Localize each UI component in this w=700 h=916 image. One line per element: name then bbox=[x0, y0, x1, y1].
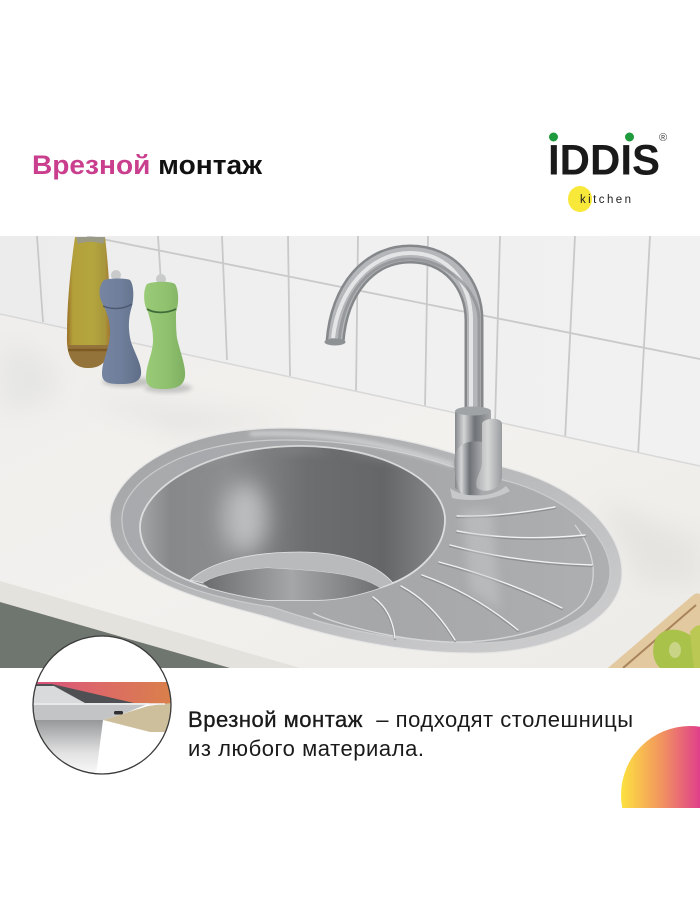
bowl bbox=[140, 446, 450, 605]
faucet collar bbox=[455, 406, 491, 416]
inset circle outline bbox=[33, 636, 171, 774]
sink bbox=[110, 428, 622, 653]
faucet handle bbox=[476, 419, 502, 491]
drainboard ribs bbox=[373, 507, 592, 641]
bowl lower ring bbox=[190, 552, 393, 588]
inset laminate top bbox=[33, 682, 171, 704]
oil bottle bbox=[67, 237, 110, 368]
inset slot bbox=[114, 711, 123, 714]
inset bowl wall bbox=[33, 720, 103, 775]
faucet tip bbox=[324, 338, 346, 346]
sink outer rim bbox=[110, 428, 622, 653]
faucet body bbox=[455, 410, 491, 490]
title: Врезной монтаж bbox=[32, 150, 263, 180]
sink deck bbox=[122, 440, 610, 643]
decorative gradient circle bbox=[621, 726, 700, 808]
logo kitchen label: kitchen bbox=[580, 194, 631, 206]
counter front face bbox=[0, 581, 300, 668]
drainboard plate outline bbox=[313, 525, 593, 642]
countertop bbox=[0, 314, 700, 668]
logo yellow blob bbox=[568, 186, 592, 212]
logo green dots bbox=[549, 132, 634, 142]
deck reflection under faucet bbox=[462, 510, 500, 610]
description line one: Врезной монтаж – подходят столешницы bbox=[188, 707, 633, 732]
inset sink flange bbox=[33, 703, 150, 720]
cabinet below counter bbox=[0, 602, 230, 668]
logo: IDDIS kitchen bbox=[548, 132, 667, 212]
logo registered mark: ® bbox=[659, 132, 667, 144]
faucet bbox=[324, 253, 510, 500]
inset sink lip bbox=[33, 684, 134, 704]
green pepper mill bbox=[144, 274, 192, 393]
bowl drain opening bbox=[203, 568, 380, 600]
description line two: из любого материала. bbox=[188, 736, 424, 761]
inset chipboard edge bbox=[103, 703, 171, 732]
faucet base bbox=[450, 486, 510, 500]
kitchen photo bbox=[0, 236, 700, 668]
green pepper bbox=[653, 630, 698, 668]
cutting board with pepper bbox=[608, 593, 700, 668]
faucet joint bbox=[454, 441, 482, 495]
faucet spout bbox=[333, 253, 479, 415]
blue pepper mill bbox=[100, 270, 154, 387]
rim highlight bbox=[250, 433, 453, 465]
description text bbox=[188, 707, 633, 761]
tiled wall bbox=[0, 236, 700, 476]
logo wordmark: IDDIS bbox=[548, 136, 660, 184]
inset: cutaway of countertop mounting bbox=[33, 636, 171, 775]
bowl highlights bbox=[223, 482, 267, 554]
